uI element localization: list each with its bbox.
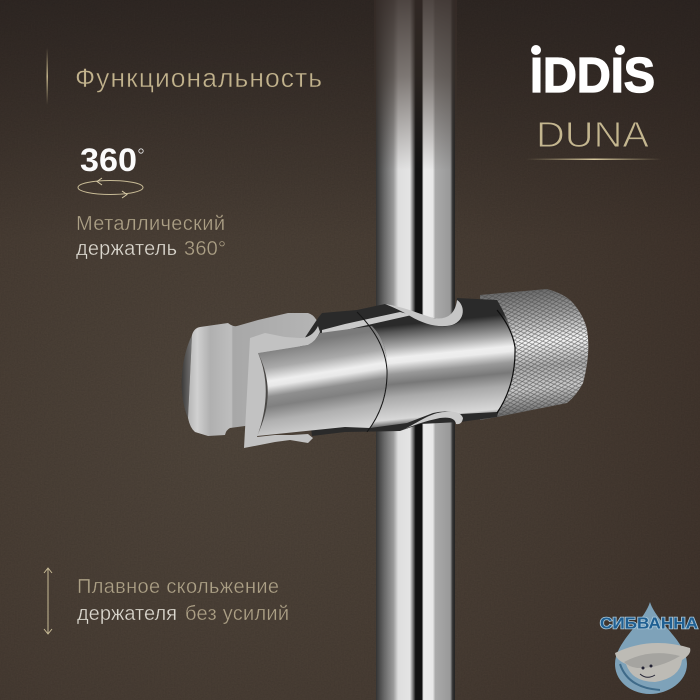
heading: Функциональность bbox=[75, 63, 322, 93]
heading divider bbox=[46, 48, 48, 105]
holder plastic back bbox=[188, 313, 320, 436]
top wave clip bbox=[385, 300, 463, 326]
text: metal holder: Металлический bbox=[76, 213, 225, 235]
shower holder bbox=[182, 289, 588, 448]
holder rear cap bbox=[182, 335, 192, 418]
watermark: Sibvanna bbox=[600, 602, 698, 694]
text: smooth sliding: держателя bbox=[77, 603, 177, 625]
logo: IDDIS: IDDIS bbox=[530, 49, 655, 103]
reflection streaks bbox=[322, 312, 412, 335]
text: smooth sliding: без усилий bbox=[185, 603, 289, 625]
watermark: Sibvanna: СИБВАННА bbox=[600, 616, 698, 632]
chrome body right section bbox=[370, 300, 515, 428]
icon: vertical slide arrow bbox=[44, 568, 52, 634]
body seam right bbox=[497, 310, 515, 413]
front plastic lip bbox=[244, 326, 320, 448]
text: smooth sliding: Плавное скольжение bbox=[77, 576, 279, 598]
icon: 360 degree rotation: 360 bbox=[80, 142, 137, 178]
text: metal holder: держатель bbox=[76, 238, 177, 260]
icon: 360 degree rotation bbox=[78, 142, 143, 198]
chrome body left section bbox=[257, 326, 387, 436]
series name: DUNA: DUNA bbox=[536, 114, 649, 155]
dark upper and lower body band bbox=[300, 298, 515, 436]
text: metal holder: 360° bbox=[184, 238, 226, 260]
bottom wave clip bbox=[400, 412, 463, 431]
shower rail rod bbox=[374, 0, 457, 700]
knurled end knob bbox=[480, 289, 588, 420]
dark front face bbox=[253, 353, 268, 436]
logo underline bbox=[526, 158, 662, 160]
body seam left bbox=[357, 312, 387, 432]
